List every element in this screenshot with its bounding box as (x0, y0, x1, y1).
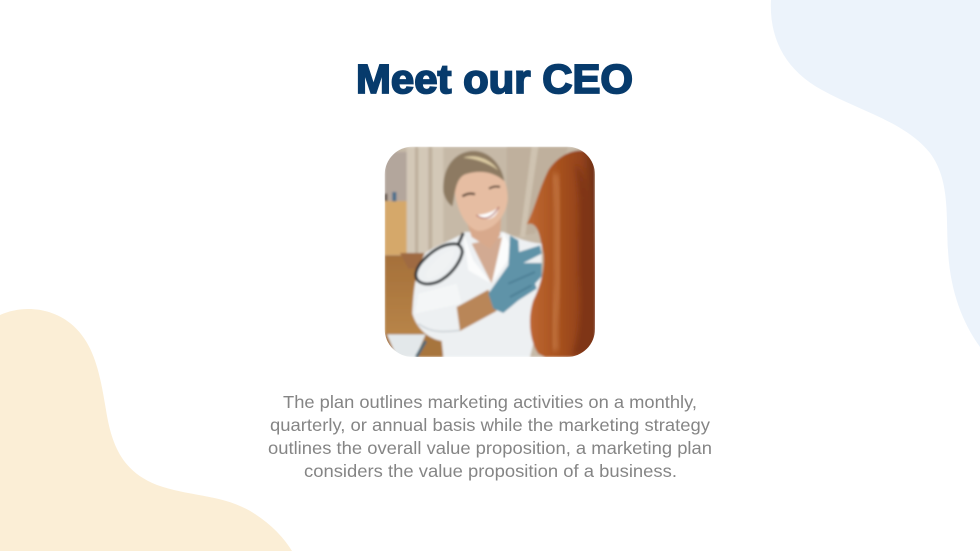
forearm (457, 290, 497, 331)
title: Meet our CEO (356, 56, 633, 102)
photo: doctor with patient (385, 147, 596, 357)
decorative blob: top right (771, 0, 980, 347)
body text: The plan outlines marketing activities on a monthly, (283, 392, 697, 412)
doctor coat (412, 232, 542, 357)
decorative blob: bottom left (0, 309, 292, 551)
body text: considers the value proposition of a business. (304, 461, 677, 481)
background wall and curtain (385, 147, 595, 357)
stethoscope (416, 233, 463, 284)
patient hair (527, 151, 595, 357)
neck and face (468, 219, 502, 244)
body text: outlines the overall value proposition, a marketing plan (268, 438, 712, 458)
glove (488, 235, 542, 313)
body text (268, 392, 712, 481)
eyes and smile (462, 194, 475, 196)
body text: quarterly, or annual basis while the marketing strategy (270, 415, 710, 435)
